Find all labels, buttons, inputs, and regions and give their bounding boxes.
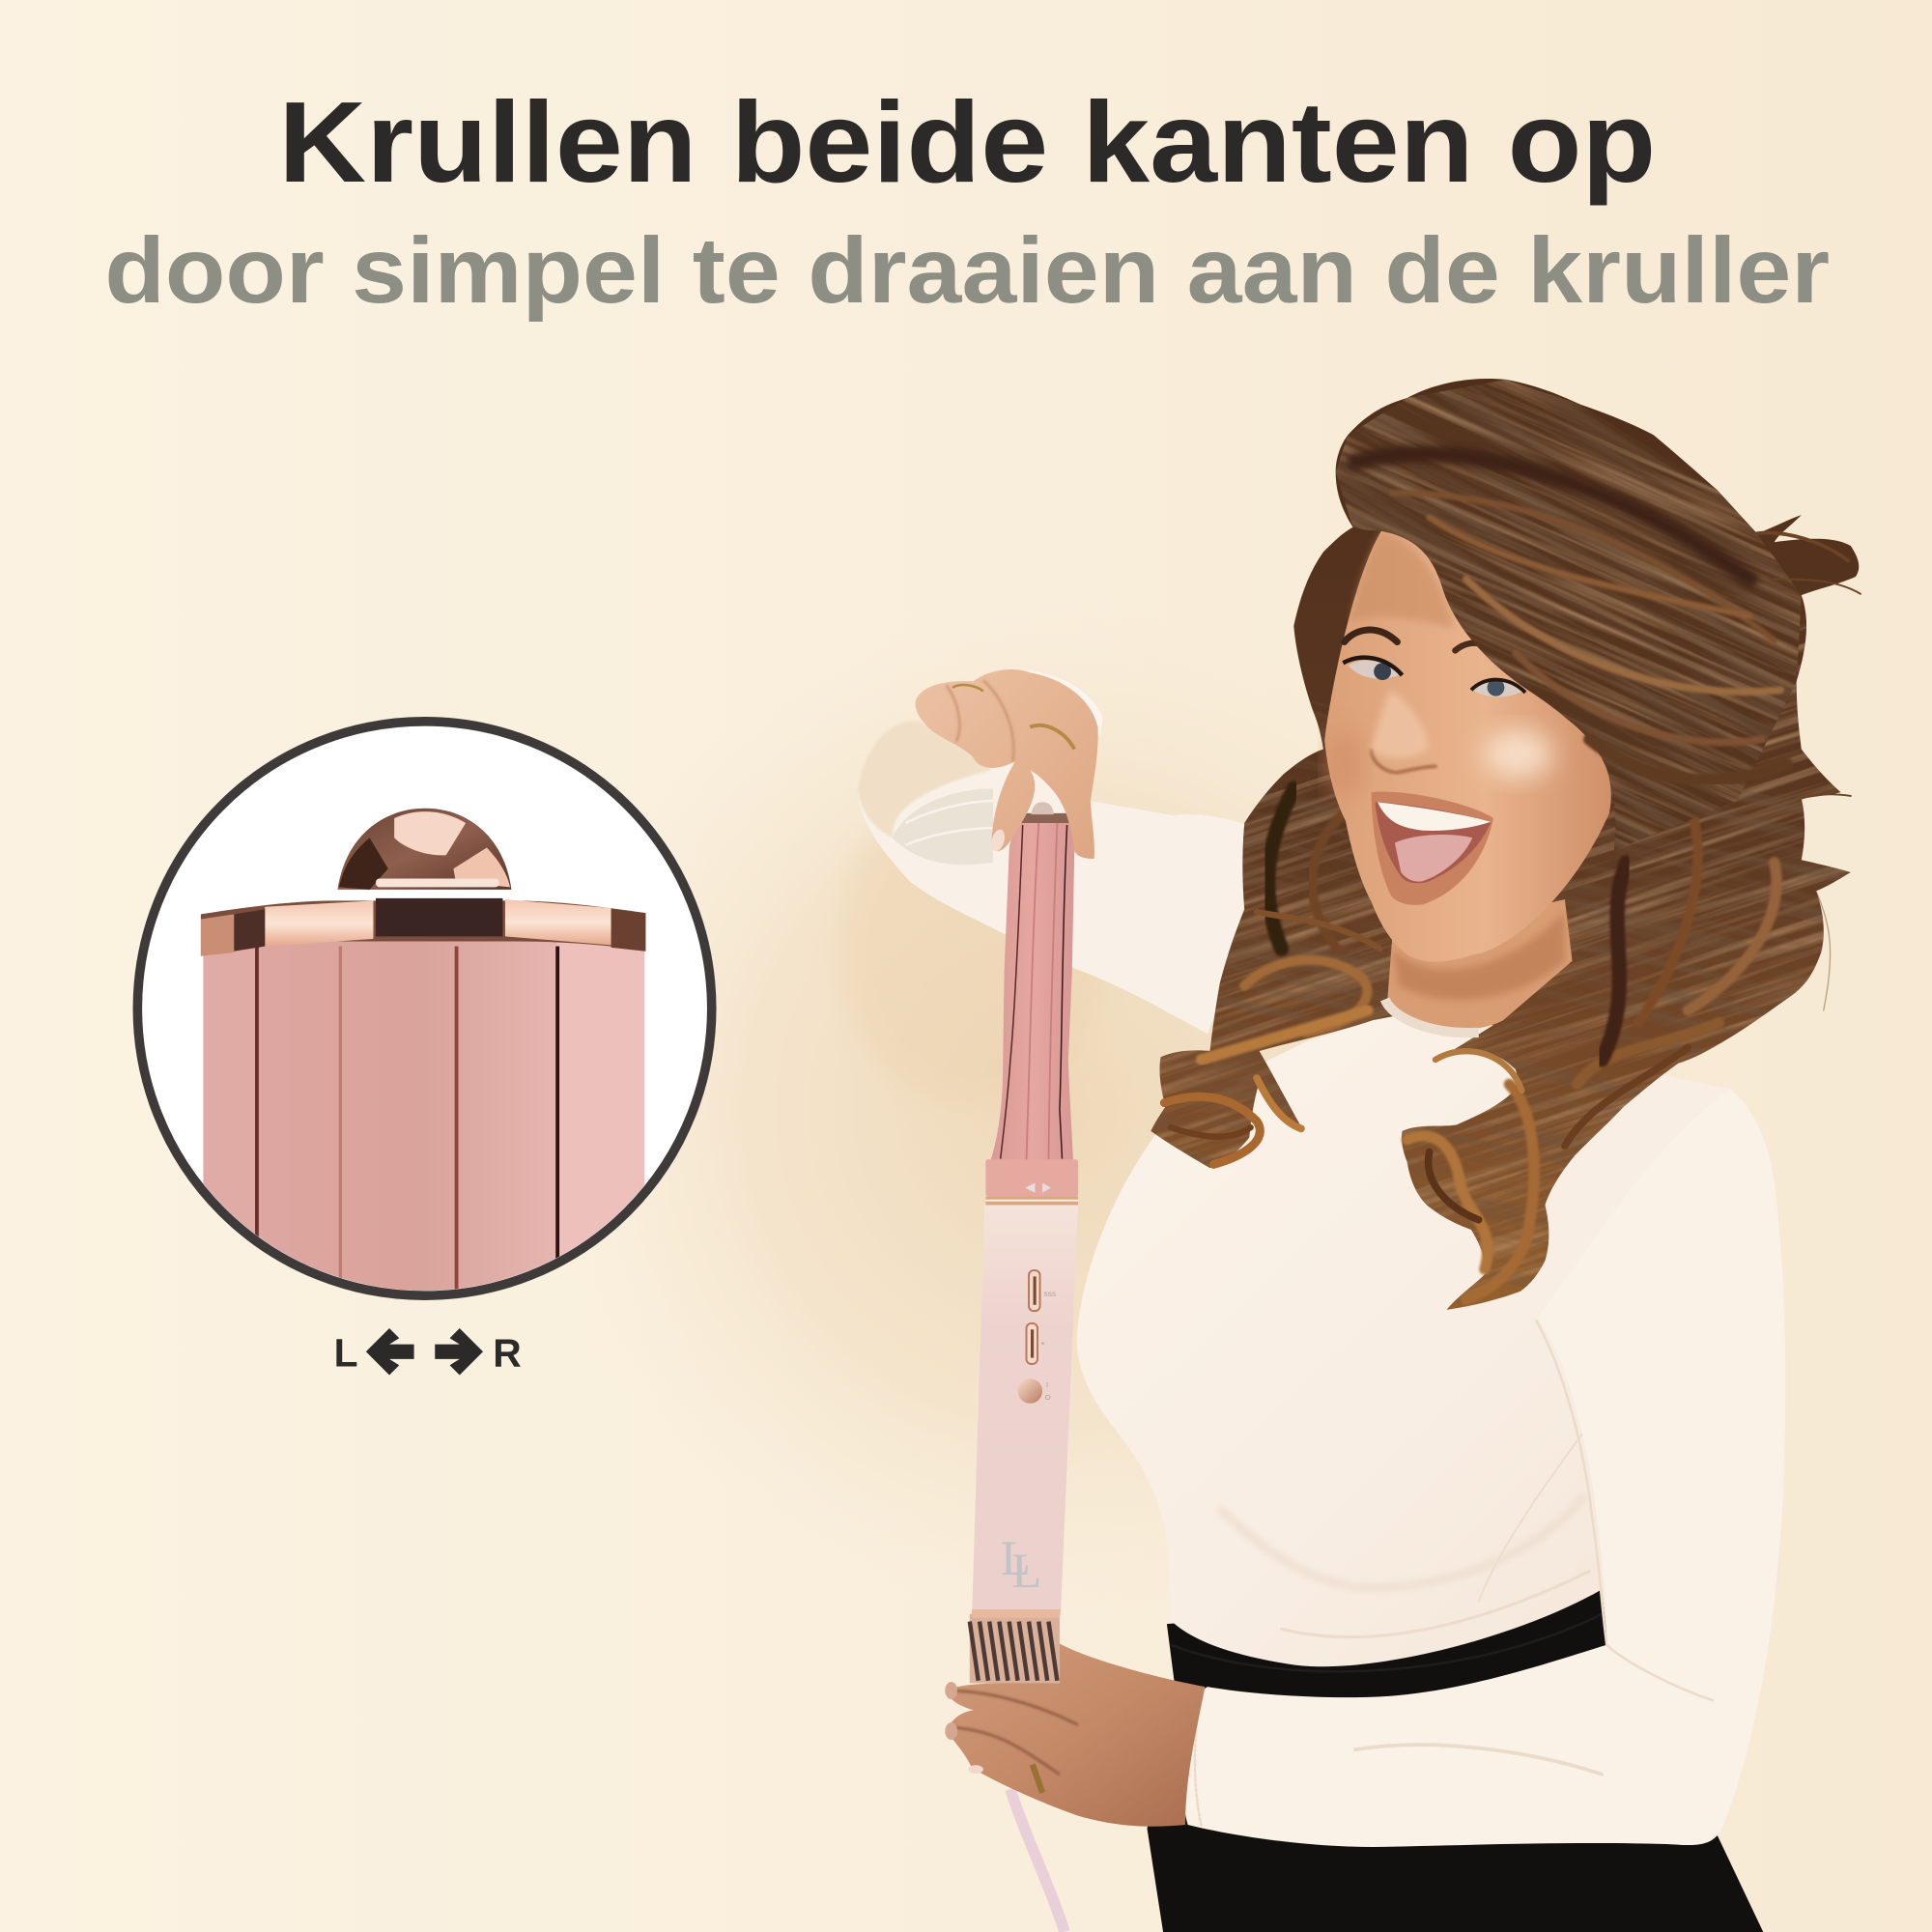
rim (201, 898, 645, 956)
sweater shading (1220, 1435, 1589, 1637)
direction labels L and R with arrows (334, 1328, 522, 1376)
trousers (1148, 1589, 1763, 1932)
hair front fringe (1335, 379, 1802, 850)
upper hand holding wand (916, 669, 1103, 859)
hair back mass (1151, 379, 1859, 1310)
raised arm sleeve (858, 721, 1249, 1034)
nose (1372, 751, 1435, 773)
rings (952, 685, 983, 692)
title: Krullen beide kanten op (278, 79, 1656, 207)
barrel (991, 822, 1074, 1161)
woman figure (858, 379, 1861, 1932)
controls: I (1046, 1380, 1048, 1389)
collar arrows (1025, 1182, 1051, 1193)
handle (972, 1205, 1078, 1609)
lowered arm sleeve (1181, 1090, 1785, 1847)
panel: barrel close-up circle (137, 722, 712, 1319)
hair lower highlights (1164, 788, 1776, 1300)
hair strands (1355, 454, 1861, 1010)
top dome (1032, 802, 1054, 814)
subtitle: door simpel te draaien aan de kruller (104, 217, 1830, 323)
lower hand (945, 1644, 1205, 1827)
neck (1387, 899, 1573, 1030)
top rim (1021, 813, 1070, 823)
mouth (1372, 791, 1493, 905)
wedding ring (1033, 1765, 1042, 1793)
gold ring (985, 1197, 1078, 1205)
logo LL (1001, 1532, 1041, 1599)
label L: L (334, 1331, 358, 1376)
arrow left (366, 1328, 414, 1375)
controls (1018, 1270, 1056, 1404)
fingernail (989, 828, 1007, 853)
sleeve cuff (1005, 670, 1103, 737)
sweater torso (1077, 998, 1785, 1666)
fringe texture (1336, 380, 1801, 848)
cheek highlight (1484, 729, 1552, 779)
dome (337, 809, 511, 890)
brows (1345, 630, 1397, 642)
label R: R (493, 1331, 522, 1376)
controls: * (1041, 1340, 1045, 1350)
tongue (1395, 835, 1472, 882)
hair texture (1152, 624, 1851, 1296)
forearm shadow (858, 721, 992, 838)
controls: SSS (1043, 1292, 1056, 1298)
mesh base (970, 1609, 1061, 1683)
grooves (255, 947, 559, 1303)
logo LL: L (1001, 1532, 1031, 1586)
product: hair wand (970, 802, 1078, 1683)
collar (985, 1159, 1078, 1197)
face (1324, 531, 1611, 962)
teeth (1378, 802, 1491, 831)
barrel grooves (1001, 823, 1067, 1161)
logo LL: L (1011, 1545, 1041, 1599)
right eye (1474, 682, 1523, 697)
sleeve folds (1195, 1321, 1713, 1826)
left eye (1348, 661, 1401, 679)
knuckle creases (947, 680, 1013, 761)
body: pink barrel (203, 930, 644, 1319)
arrow right (435, 1328, 483, 1375)
forehead shade (1350, 531, 1454, 629)
cable (1010, 1789, 1065, 1932)
controls: O (1045, 1393, 1051, 1402)
sweater neckline (1385, 999, 1479, 1033)
